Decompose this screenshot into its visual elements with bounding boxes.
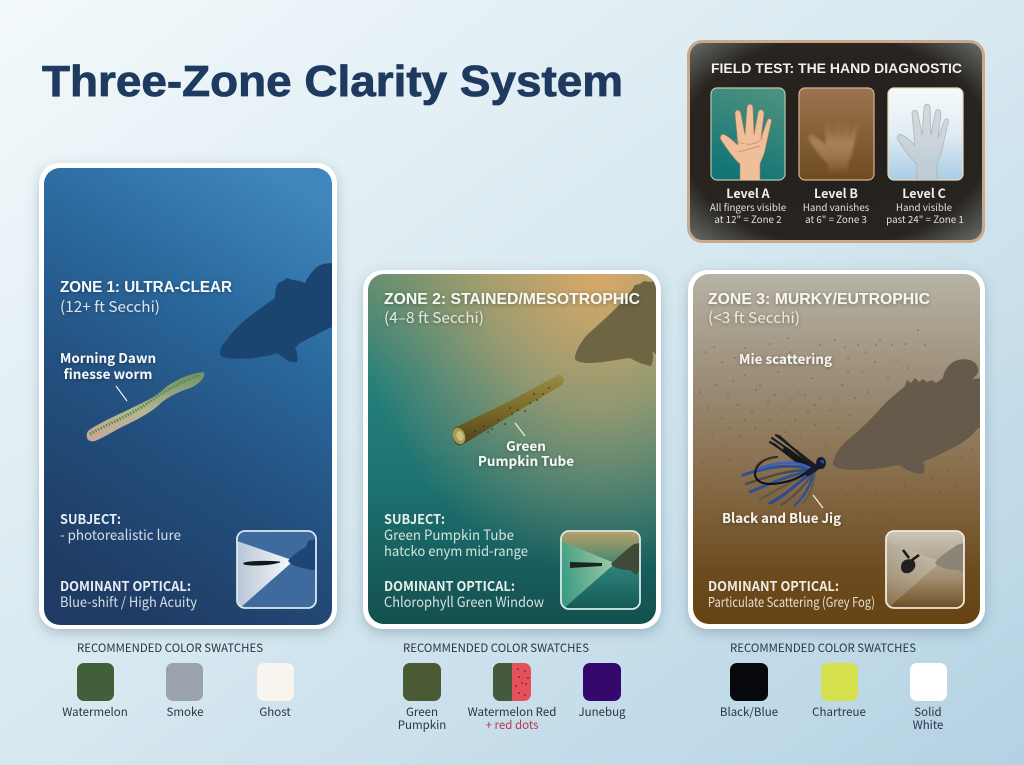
- fish silhouette zone 3: [833, 359, 985, 474]
- swatch: smoke: [166, 663, 203, 720]
- zone 2 heading: ZONE 2: STAINED/MESOTROPHIC: [384, 291, 640, 308]
- lure label zone 1: [60, 347, 156, 383]
- level C caption: Level C: [902, 183, 946, 202]
- title: Three-Zone Clarity System: [42, 57, 623, 106]
- subject text zone 2: hatcko enym mid-range: [384, 541, 528, 561]
- optical text zone 2: [384, 575, 544, 612]
- swatch: ghost: Ghost: [259, 704, 291, 720]
- subject text zone 2: SUBJECT:: [384, 508, 445, 528]
- optical text zone 3: DOMINANT OPTICAL:: [708, 575, 839, 595]
- lure label zone 3: Black and Blue Jig: [722, 507, 841, 527]
- lure: finesse worm: [87, 372, 204, 441]
- panel: zone 3 murky: [688, 270, 985, 733]
- swatch: green pumpkin: Pumpkin: [398, 717, 446, 733]
- level B caption: Hand vanishes: [803, 200, 870, 214]
- optical text zone 3: [708, 575, 875, 611]
- subject text zone 1: SUBJECT:: [60, 508, 121, 528]
- recommended swatches zone 2: RECOMMENDED COLOR SWATCHES: [403, 640, 589, 656]
- zone 2 heading: (4–8 ft Secchi): [384, 307, 484, 328]
- recommended swatches zone 2: [398, 640, 626, 733]
- optical text zone 1: DOMINANT OPTICAL:: [60, 575, 191, 595]
- subject text zone 2: Green Pumpkin Tube: [384, 525, 514, 545]
- leader line zone 3: [813, 495, 823, 508]
- zone 1 heading: (12+ ft Secchi): [60, 296, 160, 317]
- tile: level A hand: [711, 88, 785, 181]
- swatch: solid white: Solid: [914, 704, 942, 720]
- recommended swatches zone 3: RECOMMENDED COLOR SWATCHES: [730, 640, 916, 656]
- optical text zone 2: DOMINANT OPTICAL:: [384, 575, 515, 595]
- subject text zone 1: [60, 508, 181, 545]
- subject text zone 1: - photorealistic lure: [60, 525, 181, 545]
- particle scatter: [700, 330, 972, 530]
- swatch: black blue: Black/Blue: [720, 704, 778, 720]
- swatch: solid white: White: [913, 717, 943, 733]
- swatch: junebug: [578, 663, 626, 720]
- swatch: watermelon red: + red dots: [486, 717, 538, 733]
- inset: cone of vision zone 3: [886, 531, 964, 608]
- level A caption: Level A: [726, 183, 771, 202]
- level C caption: Hand visible: [896, 200, 953, 214]
- tile: level C hand: [888, 88, 963, 181]
- field test heading: FIELD TEST: THE HAND DIAGNOSTIC: [711, 61, 962, 76]
- level A caption: All fingers visible: [710, 200, 787, 214]
- swatch: ghost: [257, 663, 294, 720]
- swatch: watermelon: [62, 663, 128, 720]
- swatch: smoke: Smoke: [167, 704, 203, 720]
- zone 1 heading: ZONE 1: ULTRA-CLEAR: [60, 279, 232, 296]
- level A caption: [710, 183, 787, 226]
- fish silhouette zone 2: [575, 281, 660, 366]
- lure label zone 2: Green: [506, 435, 546, 455]
- level B caption: Level B: [814, 183, 858, 202]
- zone 3 heading: (<3 ft Secchi): [708, 307, 800, 328]
- lure label zone 1: finesse worm: [64, 363, 152, 383]
- optical text zone 1: [60, 575, 198, 612]
- lure: green pumpkin tube: [450, 375, 564, 446]
- swatch: watermelon red: Watermelon Red: [468, 704, 556, 720]
- lure label zone 2: [478, 435, 574, 470]
- swatch: solid white: [910, 663, 947, 733]
- panel: field test hand diagnostic: [688, 42, 984, 242]
- swatch: black blue: [720, 663, 778, 720]
- swatch: watermelon red: [468, 663, 556, 733]
- lure label zone 2: Pumpkin Tube: [478, 450, 574, 470]
- leader line zone 1: [116, 386, 127, 401]
- zone 3 heading: ZONE 3: MURKY/EUTROPHIC: [708, 291, 930, 308]
- inset: cone of vision zone 2: [561, 531, 640, 609]
- leader line zone 2: [515, 423, 525, 436]
- level B caption: at 6" = Zone 3: [805, 212, 867, 226]
- lure label zone 1: Morning Dawn: [60, 347, 156, 367]
- tile: level B hand: [799, 88, 874, 181]
- optical text zone 1: Blue-shift / High Acuity: [60, 592, 198, 612]
- optical text zone 2: Chlorophyll Green Window: [384, 592, 544, 612]
- zone 1 heading: [60, 279, 232, 317]
- callout: mie scattering: Mie scattering: [739, 348, 832, 368]
- level A caption: at 12" = Zone 2: [714, 212, 782, 226]
- recommended swatches zone 1: RECOMMENDED COLOR SWATCHES: [77, 640, 263, 656]
- recommended swatches zone 3: [720, 640, 947, 733]
- swatch: green pumpkin: Green: [406, 704, 438, 720]
- zone 2 heading: [384, 291, 640, 328]
- swatch: chartreuse: [812, 663, 866, 720]
- swatch: watermelon: Watermelon: [62, 704, 128, 720]
- fish silhouette zone 1: [220, 263, 340, 362]
- swatch: chartreuse: Chartreue: [812, 704, 866, 720]
- zone 3 heading: [708, 291, 930, 328]
- panel: zone 2 stained: [363, 270, 661, 733]
- level B caption: [803, 183, 870, 226]
- subject text zone 2: [384, 508, 528, 561]
- inset: cone of vision zone 1: [237, 531, 316, 608]
- swatch: junebug: Junebug: [578, 704, 626, 720]
- level C caption: [886, 183, 964, 226]
- lure: black and blue jig: [743, 435, 826, 505]
- panel: zone 1 ultra-clear: [39, 163, 340, 720]
- optical text zone 3: Particulate Scattering (Grey Fog): [708, 591, 875, 611]
- recommended swatches zone 1: [62, 640, 294, 720]
- level C caption: past 24" = Zone 1: [886, 212, 964, 226]
- swatch: green pumpkin: [398, 663, 446, 733]
